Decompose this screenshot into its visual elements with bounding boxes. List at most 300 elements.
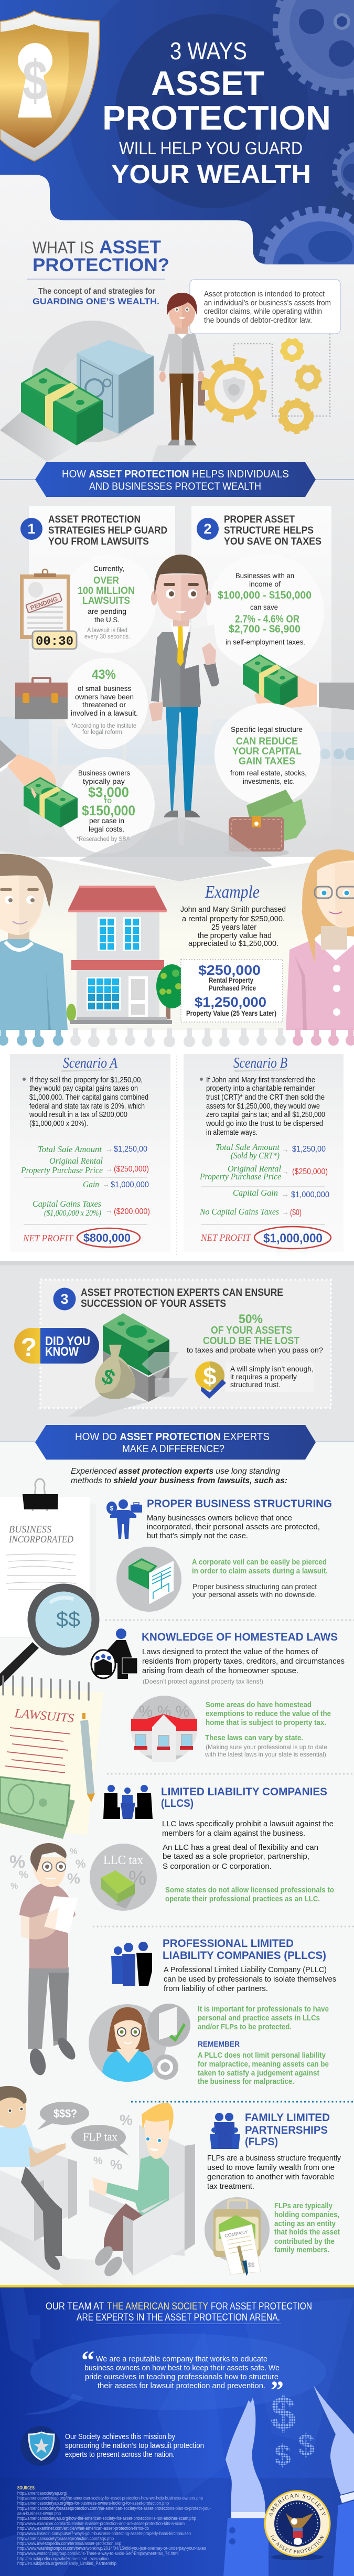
- bubble: 43 percent: 43%: [92, 667, 116, 682]
- heading: [163, 1938, 326, 1962]
- calculation: scenario A: Total Sale Amount: [38, 1144, 102, 1154]
- calculation: scenario A: $1,250,00: [114, 1145, 147, 1154]
- heading: strategy 2: PROPER ASSET: [224, 514, 295, 525]
- text: scenario A explanation: would result in a tax of $200,000: [29, 1111, 127, 1119]
- intro text: GUARDING ONE’S WEALTH.: [33, 296, 159, 306]
- illustration: incorporation paper: INCORPORATED: [8, 1534, 73, 1545]
- body text: Laws designed to protect the value of the homes of: [142, 1647, 318, 1656]
- text: sources: http://www.linkedin.com/pulse/7-ways-your-business-protecting-assets-properly-hans-kirchhausen: [17, 2531, 191, 2537]
- calculation: scenario B: Capital Gain: [233, 1188, 278, 1198]
- text: scenario A explanation: $1,000,000. Their capital gains combined: [29, 1093, 148, 1102]
- icon: company briefcase with money: [205, 2197, 270, 2276]
- intro text: experienced experts: methods to shield your business from lawsuits, such as:: [71, 1476, 287, 1485]
- callout: importance of protection: for malpractice, meaning assets can be: [198, 2060, 329, 2069]
- text: sources: SOURCES:: [17, 2485, 36, 2491]
- bubble: 43 percent: of small business: [78, 684, 131, 693]
- speech bubble: quote: their assets for lawsuit protection and prevention.: [98, 2381, 265, 2390]
- text: scenario A explanation: If they sell the property for $1,250,00,: [29, 1076, 143, 1084]
- example text: 25 years later: [211, 923, 256, 932]
- heading: scenario A: Scenario A: [63, 1055, 118, 1071]
- intro text: experienced experts: Experienced asset protection experts use long standing: [71, 1467, 280, 1476]
- heading: our team: THE AMERICAN SOCIETY: [107, 2301, 208, 2312]
- bubble: self-employment savings: $100,000 - $150,000: [218, 590, 312, 601]
- icon: clipboard and timer: [20, 569, 77, 649]
- callout: a will is not enough: [195, 1361, 314, 1399]
- callout: property values: $1,250,000: [195, 994, 266, 1010]
- banner: how do experts make a difference: [0, 1425, 354, 1460]
- body text: [162, 1819, 334, 1871]
- icon: cash and org chart: [116, 1547, 181, 1612]
- example text: the property value had: [198, 932, 272, 940]
- speech bubble: quote: ”: [271, 2375, 284, 2404]
- text: scenario A explanation: [23, 1076, 148, 1128]
- bubble: 100 million lawsuits: LAWSUITS: [82, 595, 130, 606]
- seal: American Society for Asset Protection: [264, 2490, 330, 2560]
- result: scenario A net profit: $800,000: [83, 1231, 131, 1244]
- illustration: lawsuits notebook: LAWSUITS: [13, 1707, 74, 1726]
- calculation: scenario B: ($250,000): [292, 1167, 328, 1176]
- heading: strategy 2: YOU SAVE ON TAXES: [224, 536, 321, 547]
- callout: licensed professionals: operate their professional practices as an LLC.: [165, 1895, 320, 1903]
- illustration: lawsuits notebook: [0, 1676, 104, 1839]
- left chair: [0, 2146, 77, 2241]
- callout: licensed professionals: Some states do not allow licensed professionals to: [165, 1886, 334, 1894]
- calculation: scenario B: $1,000,000: [291, 1190, 329, 1199]
- heading: LIABILITY COMPANIES (PLLCS): [163, 1950, 326, 1962]
- body text: incorporated, their personal assets are protected,: [147, 1523, 320, 1531]
- icon: house with percent signs: [131, 1696, 197, 1762]
- speech bubble: quote: “: [81, 2345, 94, 2375]
- body text: be taxed as a sole proprietor, partnership,: [163, 1852, 309, 1861]
- bubble: capital gain taxes: investments, etc.: [243, 777, 295, 785]
- illustration: man with glasses reading: [9, 1843, 86, 2077]
- callout: property values: Property Value (25 Years Later): [186, 1009, 276, 1017]
- bubble: 100 million lawsuits: [63, 555, 156, 653]
- heading: our team: FOR ASSET PROTECTION: [211, 2301, 312, 2312]
- right chair: [41, 2103, 195, 2280]
- illustration: man with glasses reading: %: [9, 1852, 25, 1872]
- icon: LLC tax: [90, 1844, 157, 1911]
- heading: strategy 3: [81, 1287, 283, 1310]
- section: knowledge of homestead laws: [91, 1628, 345, 1762]
- title: 3 WAYS: [170, 37, 247, 65]
- icon: bottom right gear: [259, 206, 354, 264]
- bubble: self-employment savings: 2.7% - 4.6% OR: [235, 614, 299, 625]
- callout: definition box: the bounds of debtor-creditor law.: [204, 316, 312, 325]
- result: scenario A net profit: NET PROFIT: [23, 1233, 74, 1243]
- body text: [142, 1647, 345, 1685]
- body text: can be used by professionals to isolate themselves: [164, 1975, 336, 1984]
- intro text: The concept of and strategies for: [38, 287, 155, 296]
- bubble: 100 million lawsuits: the U.S.: [94, 615, 120, 624]
- text: sources: http://americasocietyap.org/the-american-society-for-asset-protection-how-we-help-business-owners.php: [17, 2495, 203, 2502]
- bubble: legal costs: Business owners: [78, 769, 130, 777]
- bubble: 43 percent: owners have been: [75, 693, 134, 701]
- bubble: 100 million lawsuits: are pending: [88, 607, 126, 615]
- stat: 50 percent: to taxes and probate when you pass on?: [187, 1346, 323, 1354]
- body text: tax treatment.: [207, 2182, 254, 2191]
- callout: a will is not enough: $: [203, 1362, 217, 1390]
- title: WILL HELP YOU GUARD: [119, 139, 303, 158]
- illustration: incorporation paper: [0, 1479, 96, 1638]
- callout: a will is not enough: A will simply isn’t enough,: [230, 1365, 314, 1373]
- panel: strategy 3: [14, 1280, 331, 1417]
- icon: shield with star: [20, 2426, 60, 2466]
- callout: importance of protection: taken to satisfy a judgement against: [198, 2069, 319, 2078]
- result: scenario B net profit: [200, 1227, 331, 1249]
- bubble: 100 million lawsuits: A lawsuit is filed: [87, 627, 127, 634]
- callout: state exemptions: exemptions to reduce the value of the: [206, 1710, 331, 1718]
- illustration: two men on armchairs: %: [110, 2157, 122, 2173]
- callout: FLP holding companies: contributed by the: [274, 2238, 335, 2246]
- calculation: scenario A: ($250,000): [114, 1165, 149, 1174]
- icon: three professionals: [111, 1942, 152, 1986]
- title: [102, 37, 331, 189]
- body text: residents from property taxes, creditors, and circumstances: [142, 1657, 345, 1666]
- illustration: vault and cash: [0, 321, 154, 462]
- panel: scenario B: [184, 1054, 344, 1252]
- bubble: 100 million lawsuits: 100 MILLION: [78, 586, 135, 597]
- bubble: self-employment savings: can save: [250, 603, 278, 611]
- heading: strategy 2: [224, 514, 321, 547]
- callout: FLP holding companies: holding companies,: [274, 2211, 339, 2219]
- intro text: [33, 287, 159, 306]
- callout: importance of protection: [198, 2005, 329, 2086]
- body text: used to move family wealth from one: [207, 2163, 335, 2172]
- illustration: two men on armchairs: %: [93, 2155, 103, 2167]
- illustration: gears and shield: [205, 334, 330, 432]
- text: scenario B explanation: zero capital gains tax; and all $1,250,000: [206, 1111, 325, 1119]
- title: PROTECTION: [102, 99, 331, 137]
- heading: [245, 2112, 330, 2148]
- calculation: scenario A: Capital Gains Taxes: [33, 1199, 101, 1209]
- calculation: scenario A: ($200,000): [114, 1207, 150, 1216]
- callout: property values: Purchased Price: [209, 984, 256, 992]
- callout: corporate veil: A corporate veil can be easily be pierced: [192, 1558, 327, 1567]
- calculation: scenario B: Total Sale Amount: [216, 1142, 280, 1152]
- bubble: legal costs: legal costs.: [89, 825, 124, 833]
- text: sources: http://en.wikipedia.org/wiki/Homestead_exemption: [17, 2556, 109, 2562]
- text: scenario B explanation: [200, 1076, 325, 1137]
- hero panel: [0, 0, 354, 264]
- text: sources: http://americansocietyforassetprotection.com/the-american-society-for-asset-protections-plan-to-protect-you-: [17, 2506, 211, 2511]
- text: sources: [17, 2485, 211, 2567]
- text: sources: http://www.examiner.com/article/what-is-asset-protection-and-are-asset-protection-kits-a-scam: [17, 2521, 185, 2527]
- bubble: legal costs: *Reserached by SBA: [77, 836, 130, 843]
- callout: importance of protection: personal and practice assets in LLCs: [198, 2014, 320, 2023]
- heading: what is asset protection: WHAT IS: [33, 238, 94, 257]
- example text: John and Mary Smith purchased: [180, 906, 286, 914]
- heading: our team: [46, 2301, 312, 2324]
- text: scenario B explanation: If John and Mary first transferred the: [206, 1076, 315, 1084]
- callout: importance of protection: It is important for professionals to have: [198, 2005, 329, 2014]
- calculation: scenario A: →: [105, 1165, 113, 1173]
- callout: definition box: [190, 280, 340, 334]
- text: sources: http://www.examiner.com/article/what-american-asset-protection-firms-do: [17, 2526, 149, 2531]
- heading: PARTNERSHIPS: [245, 2124, 328, 2136]
- text: scenario A explanation: ($1,000,000 x 20%).: [29, 1120, 88, 1128]
- speech bubble: FLP tax: FLP tax: [83, 2130, 117, 2143]
- text: sources: as-a-business-owner.php: [17, 2511, 61, 2516]
- illustration: businessman with briefcase: [152, 293, 205, 467]
- callout: licensed professionals: [165, 1886, 334, 1903]
- callout: importance of protection: A PLLC does not limit personal liability: [198, 2051, 326, 2060]
- bubble: legal costs: $150,000: [82, 803, 135, 818]
- icon: meeting of three people: [103, 1785, 153, 1819]
- icon: professional woman: [89, 2004, 190, 2082]
- bubble: legal costs: per case in: [89, 816, 124, 825]
- body text: members for a claim against the business.: [162, 1829, 305, 1838]
- calculation: scenario B: ($0): [290, 1208, 302, 1217]
- heading: (LLCS): [161, 1797, 194, 1809]
- bubble: capital gain taxes: Specific legal structure: [231, 725, 303, 733]
- heading: strategy 3: SUCCESSION OF YOUR ASSETS: [81, 1298, 226, 1310]
- calculation: scenario A: Original Rental: [49, 1156, 103, 1166]
- text: sources: http://americasocietyap.org/: [17, 2490, 67, 2496]
- body text: arising from death of the homeowner spouse.: [142, 1666, 298, 1675]
- bubble: 100 million lawsuits: Currently,: [93, 565, 124, 573]
- callout: FLP holding companies: [274, 2202, 340, 2254]
- text: scenario B explanation: would go into the trust to be dispersed: [206, 1120, 323, 1128]
- bubble: 43 percent: involved in a lawsuit.: [71, 709, 138, 717]
- illustration: man with glasses reading: %: [19, 1869, 28, 1881]
- illustration: hands and dollar signs: $: [271, 2387, 296, 2439]
- callout: corporate veil: Proper business structuring can protect: [192, 1582, 317, 1591]
- text: sources: http://www.investopedia.com/terms/a/asset-protection.asp: [17, 2541, 121, 2547]
- illustration: John: [0, 854, 68, 1030]
- speech bubble: money question: [37, 2102, 89, 2130]
- calculation: scenario B: →: [282, 1145, 289, 1154]
- calculation: scenario B: Property Purchase Price: [199, 1172, 281, 1181]
- calculation: scenario B: [199, 1142, 329, 1225]
- result: scenario B net profit: $1,000,000: [263, 1231, 323, 1246]
- bubble: self-employment savings: [207, 553, 324, 671]
- badge: number 2: 2: [203, 521, 212, 537]
- text: sources: http://en.wikipedia.org/wiki/Family_Limited_Partnership: [17, 2561, 116, 2567]
- bubble: 43 percent: for legal reform.: [82, 729, 124, 736]
- banner: how asset protection helps: HOW ASSET PROTECTION HELPS INDIVIDUALS: [62, 469, 289, 480]
- icon: person with money bag and briefcase: $: [110, 1505, 114, 1512]
- icon: clipboard and timer: PENDING: [29, 595, 59, 612]
- speech bubble: money question: $$$?: [53, 2107, 77, 2120]
- badge: number 3: [53, 1287, 76, 1311]
- illustration: Mary: [286, 849, 354, 1030]
- heading: strategy 1: [48, 514, 167, 547]
- callout: FLP holding companies: FLPs are typically: [274, 2202, 332, 2210]
- seal: American Society for Asset Protection: for ASSET PROTECTION: [271, 2535, 324, 2554]
- bubble: self-employment savings: $2,700 - $6,900: [229, 623, 301, 635]
- result: scenario A net profit: [23, 1228, 140, 1247]
- panel: strategy 1: [0, 506, 175, 854]
- text: society mission: Our Society achieves this mission by: [65, 2432, 175, 2441]
- seal: American Society for Asset Protection: AMERICAN SOCIETY: [269, 2494, 326, 2517]
- callout: property values: $250,000: [198, 962, 261, 978]
- example text: appreciated to $1,250,000.: [188, 940, 278, 948]
- calculation: scenario A: ($1,000,000 x 20%): [44, 1209, 101, 1218]
- section: proper business structuring: [106, 1498, 332, 1612]
- callout: FLP holding companies: acting as an entity: [274, 2220, 336, 2228]
- body text: (Doesn’t protect against property tax liens!): [143, 1678, 263, 1685]
- illustration: man with glasses reading: %: [10, 1882, 18, 1891]
- divider dots: [176, 1056, 177, 1255]
- illustration: two men on armchairs: %: [120, 2112, 133, 2128]
- calculation: scenario A: →: [102, 1180, 110, 1188]
- heading: scenario B: Scenario B: [233, 1055, 287, 1071]
- heading: PROPER BUSINESS STRUCTURING: [147, 1498, 332, 1510]
- bubble: legal costs: typically pay: [83, 777, 125, 785]
- calculation: scenario A: →: [105, 1206, 113, 1215]
- body text: LLC laws specifically prohibit a lawsuit against the: [162, 1819, 334, 1828]
- callout: definition box: creditor claims, while operating within: [204, 307, 322, 316]
- body text: but that’s simply not the case.: [147, 1531, 248, 1540]
- body text: generation to another with favorable: [207, 2173, 335, 2181]
- title: YOUR WEALTH: [111, 159, 311, 189]
- bubble: 100 million lawsuits: every 30 seconds.: [84, 634, 130, 640]
- heading: strategy 1: YOU FROM LAWSUITS: [48, 536, 149, 547]
- calculation: scenario A: →: [105, 1145, 113, 1153]
- speech bubble: FLP tax: [71, 2125, 129, 2156]
- body text: [147, 1514, 320, 1540]
- text: sources: http://www.watsoncpagroup.com/kb/Is-There-a-way-to-avoid-Self-Employment-tax_74.html: [17, 2551, 178, 2557]
- heading: (FLPS): [245, 2136, 278, 2148]
- callout: corporate veil: [192, 1558, 328, 1599]
- text: sources: http://americansocietyforassetprotection.com/faqs.php: [17, 2536, 114, 2541]
- callout: FLP holding companies: that holds the asset: [274, 2228, 340, 2237]
- bubble: self-employment savings: income of: [249, 580, 281, 588]
- icon: magnifying glass: $$: [56, 1608, 80, 1631]
- banner: how do experts make a difference: HOW DO ASSET PROTECTION EXPERTS: [75, 1431, 270, 1443]
- text: scenario B explanation: in alternate ways.: [206, 1129, 258, 1137]
- result: scenario B net profit: NET PROFIT: [200, 1232, 252, 1243]
- icon: wallet with cash: [224, 790, 306, 857]
- body text: S corporation or C corporation.: [163, 1862, 272, 1871]
- heading: what is asset protection: [27, 237, 169, 279]
- panel: scenario A: [10, 1054, 170, 1252]
- callout: property values: [181, 960, 283, 1022]
- bubble: capital gain taxes: [214, 703, 320, 806]
- text: scenario B explanation: trust (CRT)* and the CRT then sold the: [206, 1093, 325, 1102]
- body text: [164, 1965, 336, 1993]
- icon: businessman with family: [91, 1628, 137, 1679]
- calculation: scenario B: →: [282, 1190, 289, 1198]
- illustration: man with glasses reading: %: [67, 1870, 80, 1887]
- body text: from liability of other partners.: [164, 1984, 268, 1993]
- bubble: 43 percent: [62, 658, 148, 749]
- callout: importance of protection: the business for malpractice.: [198, 2078, 294, 2086]
- text: scenario B explanation: assets for $1,250,000, they would owe: [206, 1102, 320, 1111]
- bubble: self-employment savings: Businesses with an: [235, 571, 294, 580]
- calculation: scenario B: (Sold by CRT*): [231, 1151, 280, 1161]
- badge: number 1: 1: [27, 521, 36, 537]
- calculation: scenario B: →: [282, 1208, 289, 1216]
- speech bubble: quote: [23, 2334, 326, 2414]
- icon: company briefcase with money: COMPANY: [224, 2229, 248, 2239]
- speech bubble: quote: pride ourselves in teaching professionals how to structure: [85, 2372, 278, 2381]
- intro text: experienced experts: [71, 1467, 287, 1485]
- icon: hand with cash: [243, 654, 354, 710]
- heading: our team: ARE EXPERTS IN THE ASSET PROTECTION ARENA.: [77, 2312, 280, 2323]
- fringe: drips below people: [0, 1028, 354, 1047]
- callout: state exemptions: [205, 1701, 331, 1758]
- heading: strategy 2: STRUCTURE HELPS: [224, 525, 314, 536]
- text: sources: http://americansocietyap.org/how-the-american-society-for-asset-protection-is-not-another-scam.php: [17, 2516, 196, 2521]
- icon: clipboard and timer: 00:30: [36, 635, 73, 649]
- body text: FLPs are a business structure frequently: [207, 2154, 341, 2163]
- callout: did you know: DID YOU: [45, 1334, 90, 1348]
- speech bubble: quote: business owners on how best to keep their assets safe. We: [84, 2364, 280, 2372]
- illustration: cash stacks and money bag: [68, 1313, 189, 1417]
- banner: how asset protection helps: [0, 462, 354, 497]
- example text: [180, 882, 286, 948]
- icon: gold shield with keyhole: $: [23, 48, 48, 112]
- example text: a rental property for $250,000.: [182, 915, 285, 923]
- callout: state exemptions: (Making sure your professional is up to date: [206, 1743, 327, 1751]
- callout: corporate veil: in order to claim assets during a lawsuit.: [192, 1567, 328, 1576]
- bubble: 100 million lawsuits: OVER: [93, 575, 119, 587]
- heading: [161, 1786, 327, 1809]
- speech bubble: quote: We are a reputable company that works to educate: [96, 2355, 267, 2364]
- badge: number 1: [20, 518, 42, 540]
- illustration: hands and dollar signs: $: [298, 2428, 315, 2462]
- icon: LLC tax: LLC tax: [103, 1854, 143, 1867]
- stat: 50 percent: COULD BE THE LOST: [203, 1335, 299, 1347]
- calculation: scenario B: →: [282, 1167, 289, 1176]
- illustration: rental house: [67, 886, 189, 1024]
- callout: a will is not enough: it requires a properly: [230, 1372, 297, 1381]
- text: society mission: [65, 2432, 204, 2459]
- bubble: legal costs: $3,000: [88, 784, 129, 800]
- icon: gold shield with keyhole: [0, 11, 100, 161]
- text: scenario A explanation: they would pay capital gains taxes on: [29, 1084, 138, 1093]
- bubble overlap legs: [164, 707, 200, 845]
- footer panel: [0, 2285, 354, 2576]
- calculation: scenario B: No Capital Gains Taxes: [199, 1207, 279, 1217]
- illustration: hands and dollar signs: [223, 2382, 354, 2576]
- callout: property values: Rental Property: [209, 976, 253, 984]
- heading: PROFESSIONAL LIMITED: [163, 1938, 294, 1950]
- text: society mission: sponsoring the nation’s top lawsuit protection: [65, 2441, 204, 2450]
- callout: FLP holding companies: family members.: [274, 2246, 329, 2254]
- illustration: man with glasses reading: %: [70, 1847, 77, 1856]
- text: sources: http://americasocietyap.org/tips-for-business-owners-looking-for-asset-protection.php: [17, 2500, 169, 2506]
- icon: company briefcase with money: $$: [248, 2261, 255, 2269]
- body text: [207, 2154, 341, 2191]
- stat: 50 percent: 50%: [239, 1312, 263, 1326]
- icon: hand with cash: [0, 740, 78, 827]
- skyline background: [0, 717, 354, 765]
- badge: number 2: [197, 518, 219, 540]
- bubble: legal costs: TO: [104, 797, 112, 805]
- bubble: capital gain taxes: CAN REDUCE: [236, 736, 298, 747]
- callout: did you know: ?: [21, 1333, 37, 1362]
- section: professional LLCs: [89, 1938, 336, 2086]
- callout: did you know: [14, 1328, 99, 1364]
- heading: strategy 1: ASSET PROTECTION: [48, 514, 141, 525]
- heading: our team: OUR TEAM AT: [46, 2301, 104, 2312]
- heading: KNOWLEDGE OF HOMESTEAD LAWS: [142, 1631, 338, 1643]
- title: ASSET: [151, 64, 264, 102]
- callout: state exemptions: home that is subject to property tax.: [206, 1719, 326, 1727]
- callout: corporate veil: your personal assets with no downside.: [192, 1590, 317, 1599]
- callout: definition box: Asset protection is intended to protect: [204, 290, 325, 299]
- heading: what is asset protection: ASSET: [99, 237, 161, 258]
- calculation: scenario A: $1,000,000: [111, 1180, 149, 1189]
- callout: importance of protection: REMEMBER: [198, 2040, 240, 2049]
- body text: An LLC has a great deal of flexibility and can: [163, 1843, 318, 1852]
- example text: Example: [205, 882, 260, 902]
- bubble: capital gain taxes: YOUR CAPITAL: [232, 746, 302, 757]
- calculation: scenario A: [20, 1144, 150, 1225]
